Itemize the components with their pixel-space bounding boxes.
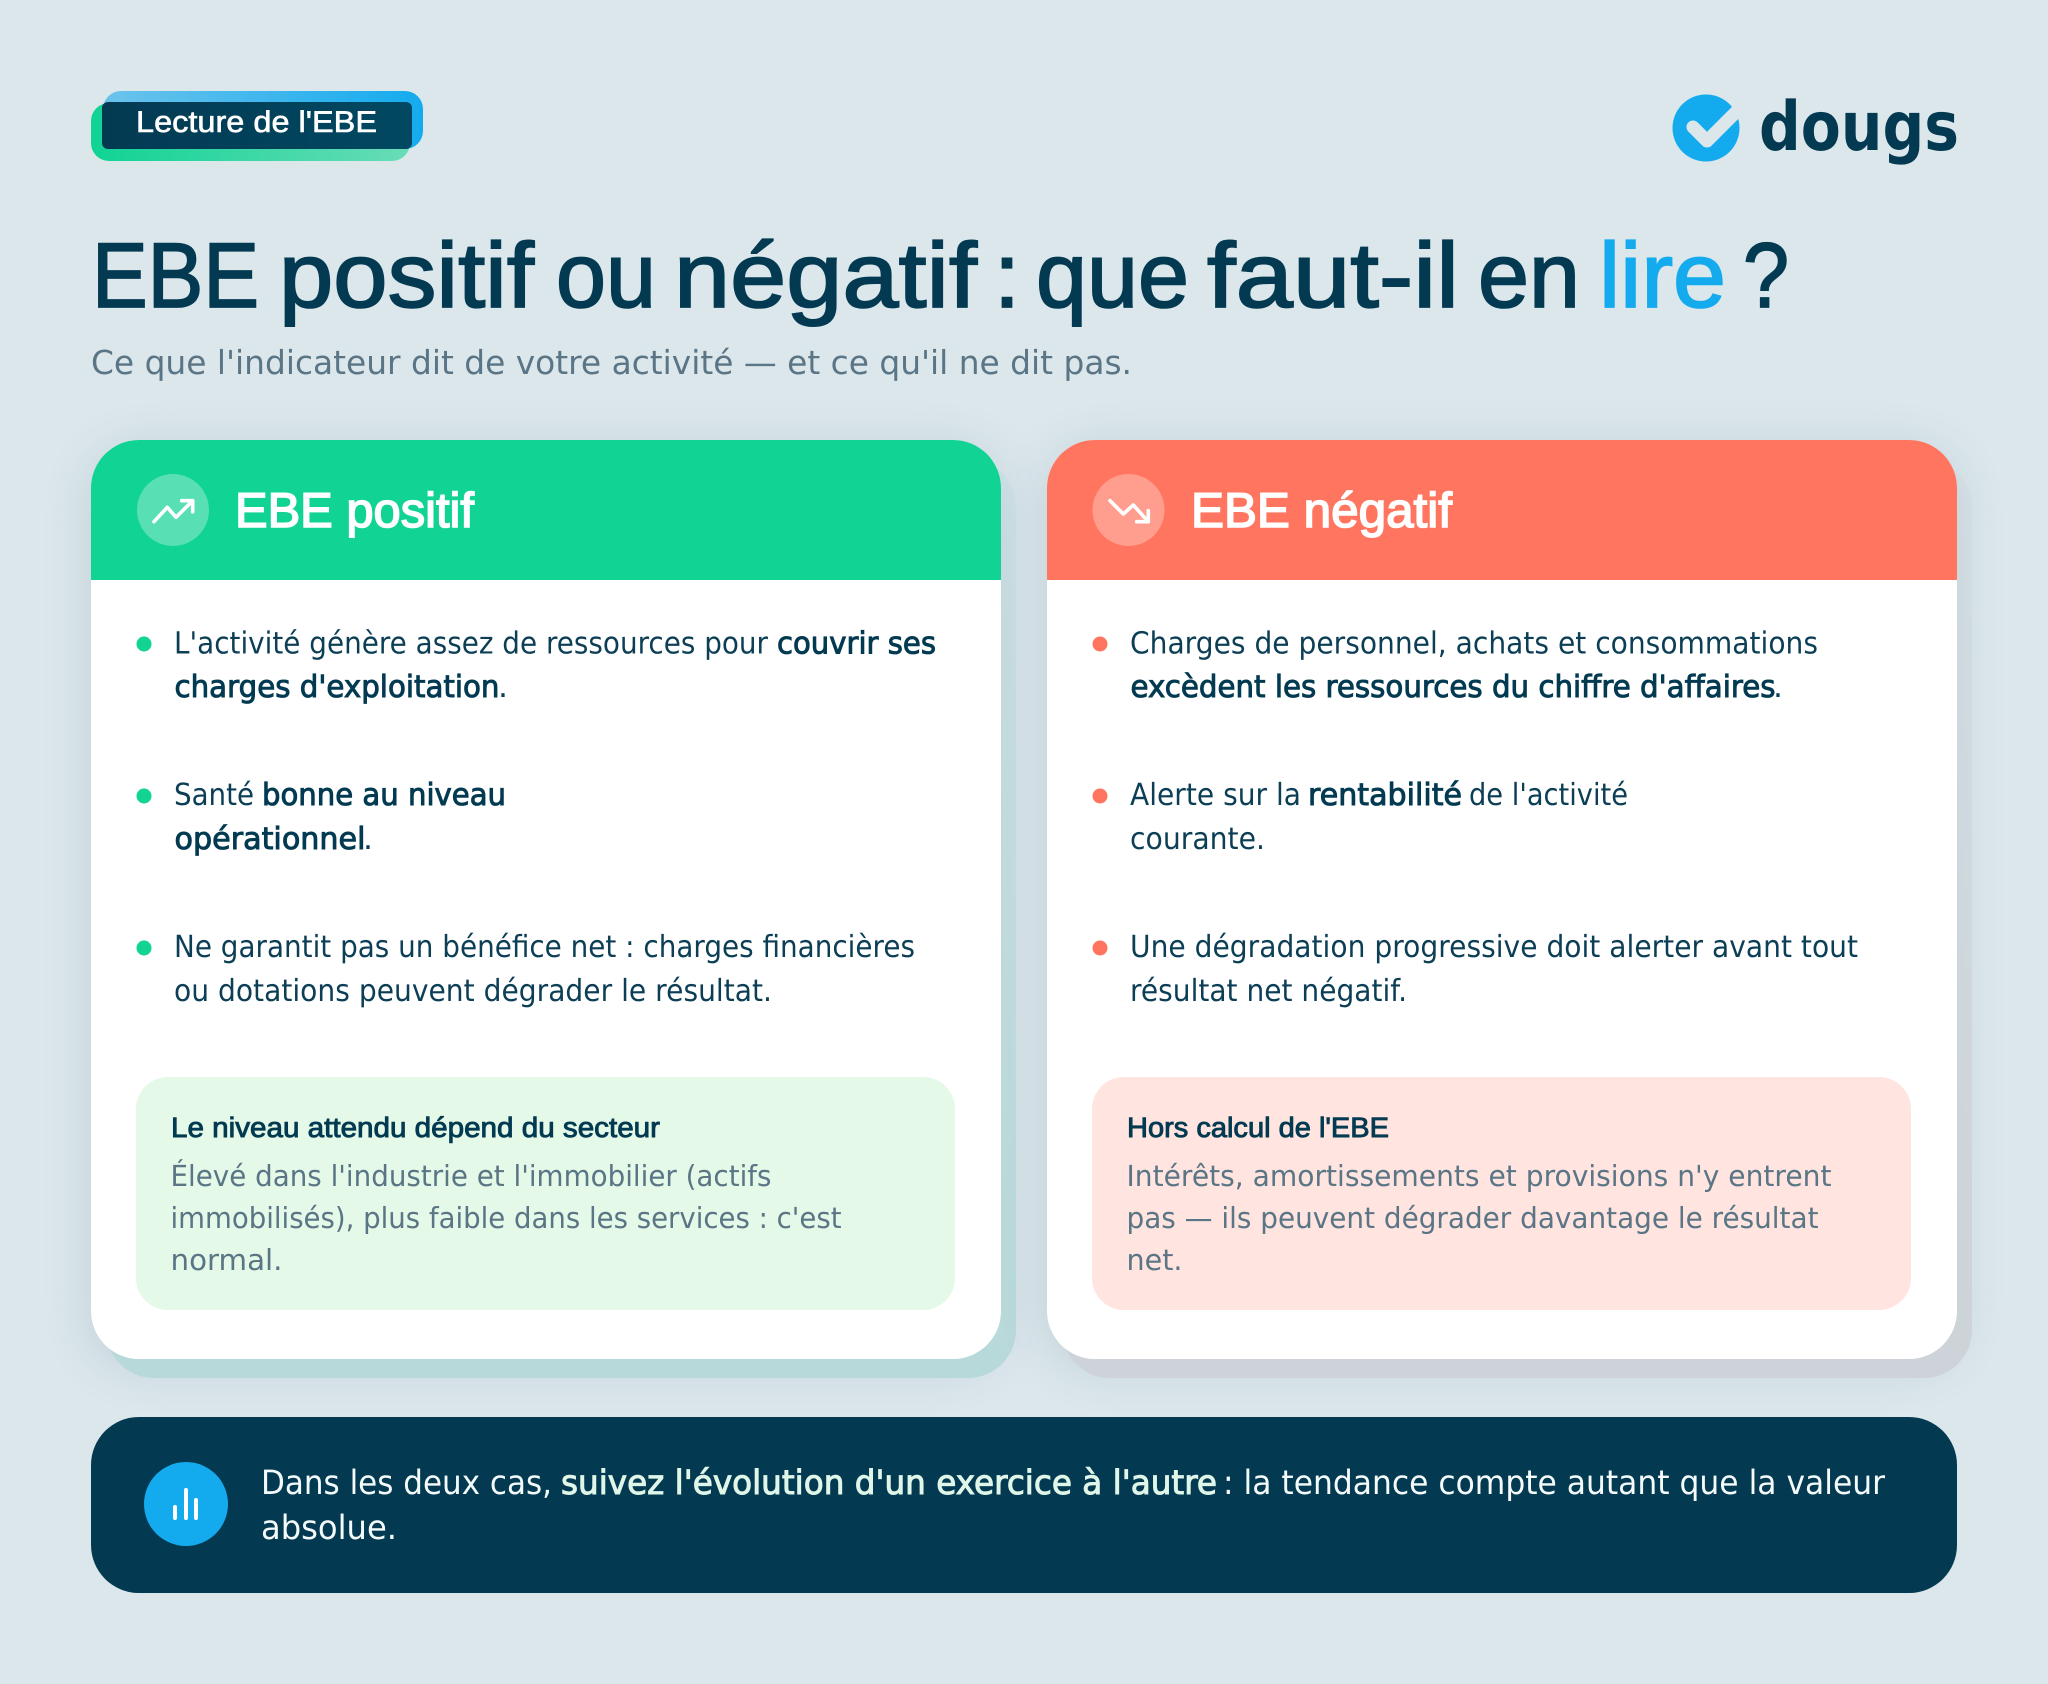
bullet 1: couvrir ses bbox=[777, 626, 936, 662]
bullet 2: courante. bbox=[1130, 822, 1265, 857]
logo: dougs bbox=[1672, 88, 1959, 167]
bullet 3: résultat net négatif. bbox=[1130, 974, 1407, 1009]
logo: dougs: dougs bbox=[1759, 88, 1959, 167]
banner text bbox=[261, 1463, 1885, 1547]
bullet 2 bbox=[136, 778, 506, 857]
banner: suivez l'évolution bbox=[91, 1417, 1957, 1593]
title: que bbox=[1036, 225, 1189, 327]
title: positif bbox=[279, 225, 534, 327]
bullet 1: L'activité génère assez de ressources pour bbox=[174, 626, 768, 662]
title: lire bbox=[1599, 225, 1726, 327]
panel: EBE négatif bbox=[1047, 440, 1972, 1378]
bullet 1: excèdent les ressources du chiffre d'affaires bbox=[1130, 670, 1776, 705]
banner text: suivez l'évolution d'un exercice à l'autre bbox=[561, 1463, 1217, 1502]
header band: EBE positif bbox=[91, 440, 1001, 580]
banner text: absolue. bbox=[261, 1508, 397, 1547]
bullet 2: . bbox=[363, 822, 373, 857]
title: en bbox=[1478, 225, 1580, 327]
bullet 1: . bbox=[498, 670, 508, 705]
bullet 1 bbox=[136, 626, 936, 705]
bullet 3: Ne garantit pas un bénéfice net : charges financières bbox=[174, 930, 915, 965]
icon: bar chart bbox=[144, 1462, 228, 1546]
bullet 1: charges d'exploitation bbox=[174, 670, 500, 705]
panel: EBE positif bbox=[91, 440, 1016, 1378]
bullet 2: bonne au niveau bbox=[262, 778, 506, 813]
callout: le niveau attendu bbox=[136, 1077, 955, 1310]
bullet 3 bbox=[136, 930, 915, 1009]
title: faut-il bbox=[1207, 225, 1459, 327]
title: négatif bbox=[674, 225, 977, 327]
callout: hors calcul bbox=[1092, 1077, 1911, 1310]
bullet 1 bbox=[1092, 626, 1818, 705]
heading: EBE négatif: EBE négatif bbox=[1191, 484, 1452, 538]
bullet 1: Charges de personnel, achats et consommations bbox=[1130, 626, 1818, 662]
callout: le niveau attendu: Élevé dans l'industrie et l'immobilier (actifs bbox=[170, 1159, 772, 1193]
banner text: : la tendance compte autant que la valeur bbox=[1223, 1463, 1885, 1502]
callout: le niveau attendu: immobilisés), plus faible dans les services : c'est bbox=[170, 1201, 842, 1235]
bullet 3 bbox=[1092, 930, 1858, 1009]
title bbox=[92, 225, 1789, 327]
bullet 1: . bbox=[1773, 670, 1783, 705]
banner text: Dans les deux cas, bbox=[261, 1463, 552, 1502]
tag: Lecture de l'EBE: Lecture de l'EBE bbox=[136, 106, 377, 139]
title: EBE bbox=[92, 225, 259, 327]
title: : bbox=[994, 225, 1020, 327]
callout: hors calcul: net. bbox=[1126, 1243, 1182, 1277]
bullet 2: Alerte sur la bbox=[1130, 778, 1301, 813]
title: ou bbox=[556, 225, 656, 327]
bullet 2: Santé bbox=[174, 778, 254, 813]
callout: hors calcul: pas — ils peuvent dégrader davantage le résultat bbox=[1126, 1201, 1818, 1235]
bullet 3: ou dotations peuvent dégrader le résultat. bbox=[174, 974, 772, 1009]
callout: hors calcul: Intérêts, amortissements et provisions n'y entrent bbox=[1126, 1159, 1832, 1193]
bullet 2: opérationnel bbox=[174, 822, 366, 857]
callout: le niveau attendu: normal. bbox=[170, 1243, 282, 1277]
subtitle: Ce que l'indicateur dit de votre activité — et ce qu'il ne dit pas. bbox=[91, 343, 1132, 382]
bullet 2: rentabilité bbox=[1308, 778, 1462, 813]
callout: hors calcul: Hors calcul de l'EBE bbox=[1127, 1112, 1389, 1143]
bullet 3: Une dégradation progressive doit alerter avant tout bbox=[1130, 930, 1858, 965]
tag: Lecture de l'EBE bbox=[91, 91, 423, 161]
bullet 2: de l'activité bbox=[1469, 778, 1628, 813]
header band: EBE négatif bbox=[1047, 440, 1957, 580]
icon: trend up bbox=[137, 474, 209, 546]
heading: EBE positif: EBE positif bbox=[235, 484, 474, 538]
bullet 2 bbox=[1092, 778, 1628, 857]
callout: le niveau attendu: Le niveau attendu dépend du secteur bbox=[171, 1112, 660, 1143]
icon: trend down bbox=[1092, 474, 1164, 546]
title: ? bbox=[1743, 225, 1789, 327]
